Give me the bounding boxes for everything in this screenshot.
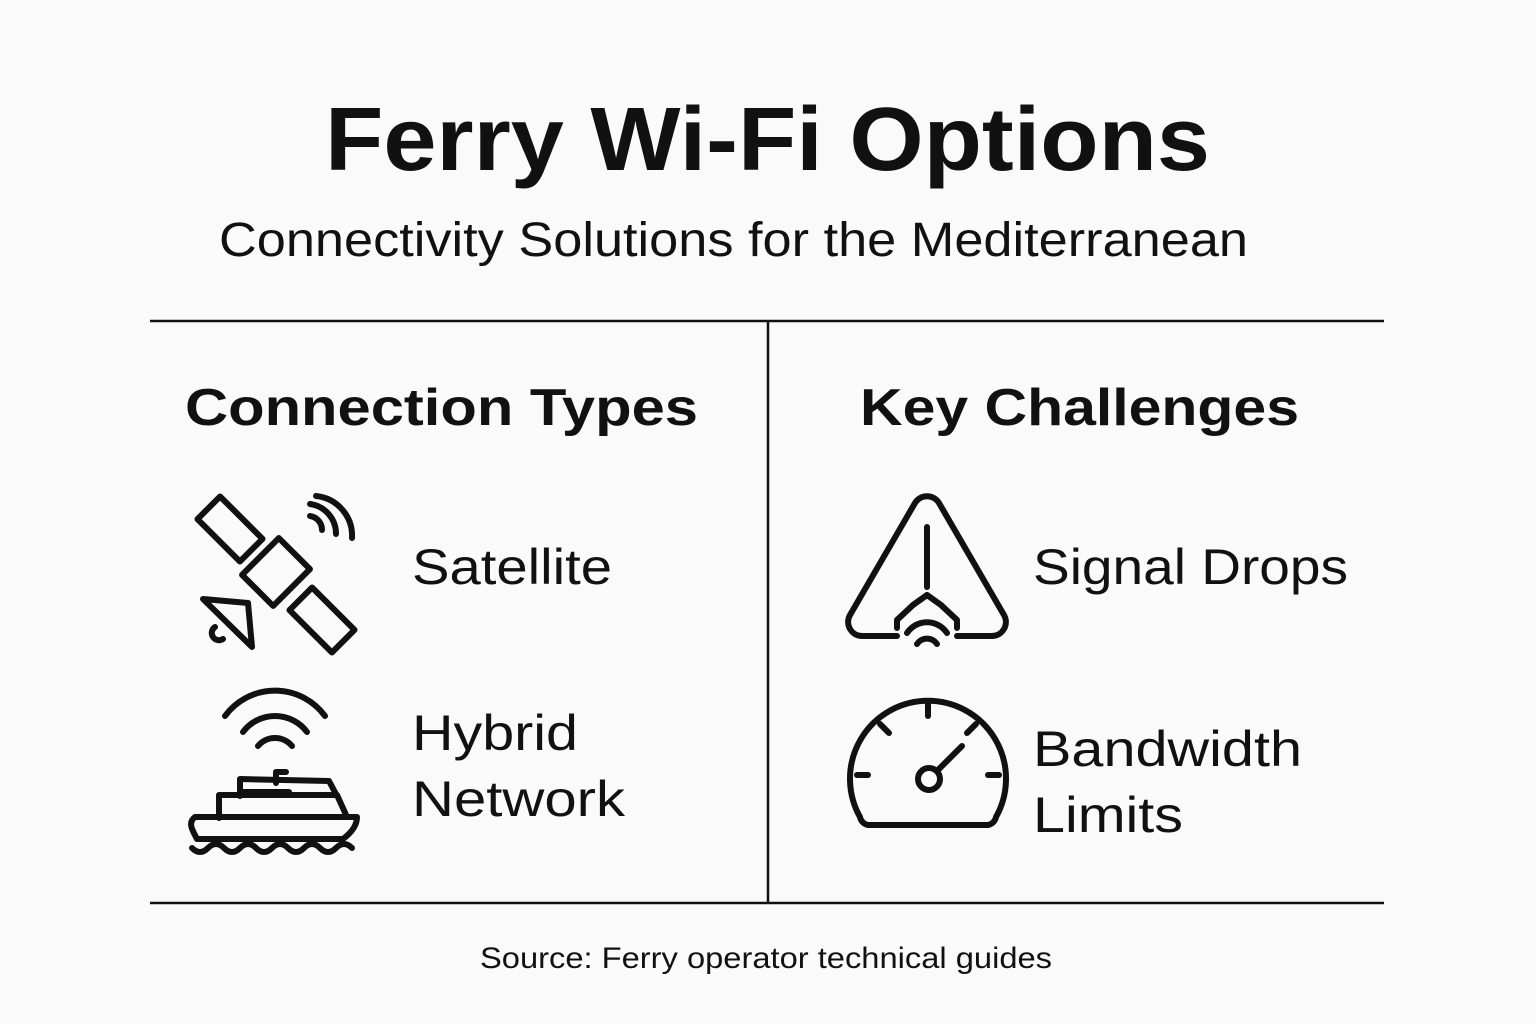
title: Ferry Wi-Fi Options <box>325 90 1210 190</box>
icon: speedometer <box>850 701 1006 825</box>
heading: key challenges: Key Challenges <box>860 379 1299 437</box>
panel: key challenges <box>848 379 1348 843</box>
icon: ferry with wifi <box>191 691 357 852</box>
icon: signal drop warning <box>848 496 1006 644</box>
panel: key challenges: Limits <box>1033 787 1183 843</box>
icon: satellite <box>197 496 355 653</box>
source note: Source: Ferry operator technical guides <box>480 942 1052 975</box>
heading: connection types: Connection Types <box>185 379 698 437</box>
label: bandwidth limits: Bandwidth <box>1033 721 1302 777</box>
panel: connection types <box>185 379 698 852</box>
subtitle: Connectivity Solutions for the Mediterranean <box>219 214 1248 267</box>
label: hybrid network: Hybrid <box>412 705 578 761</box>
label: satellite: Satellite <box>412 539 612 595</box>
label: signal drops: Signal Drops <box>1033 539 1348 595</box>
panel: connection types: Network <box>412 771 626 827</box>
